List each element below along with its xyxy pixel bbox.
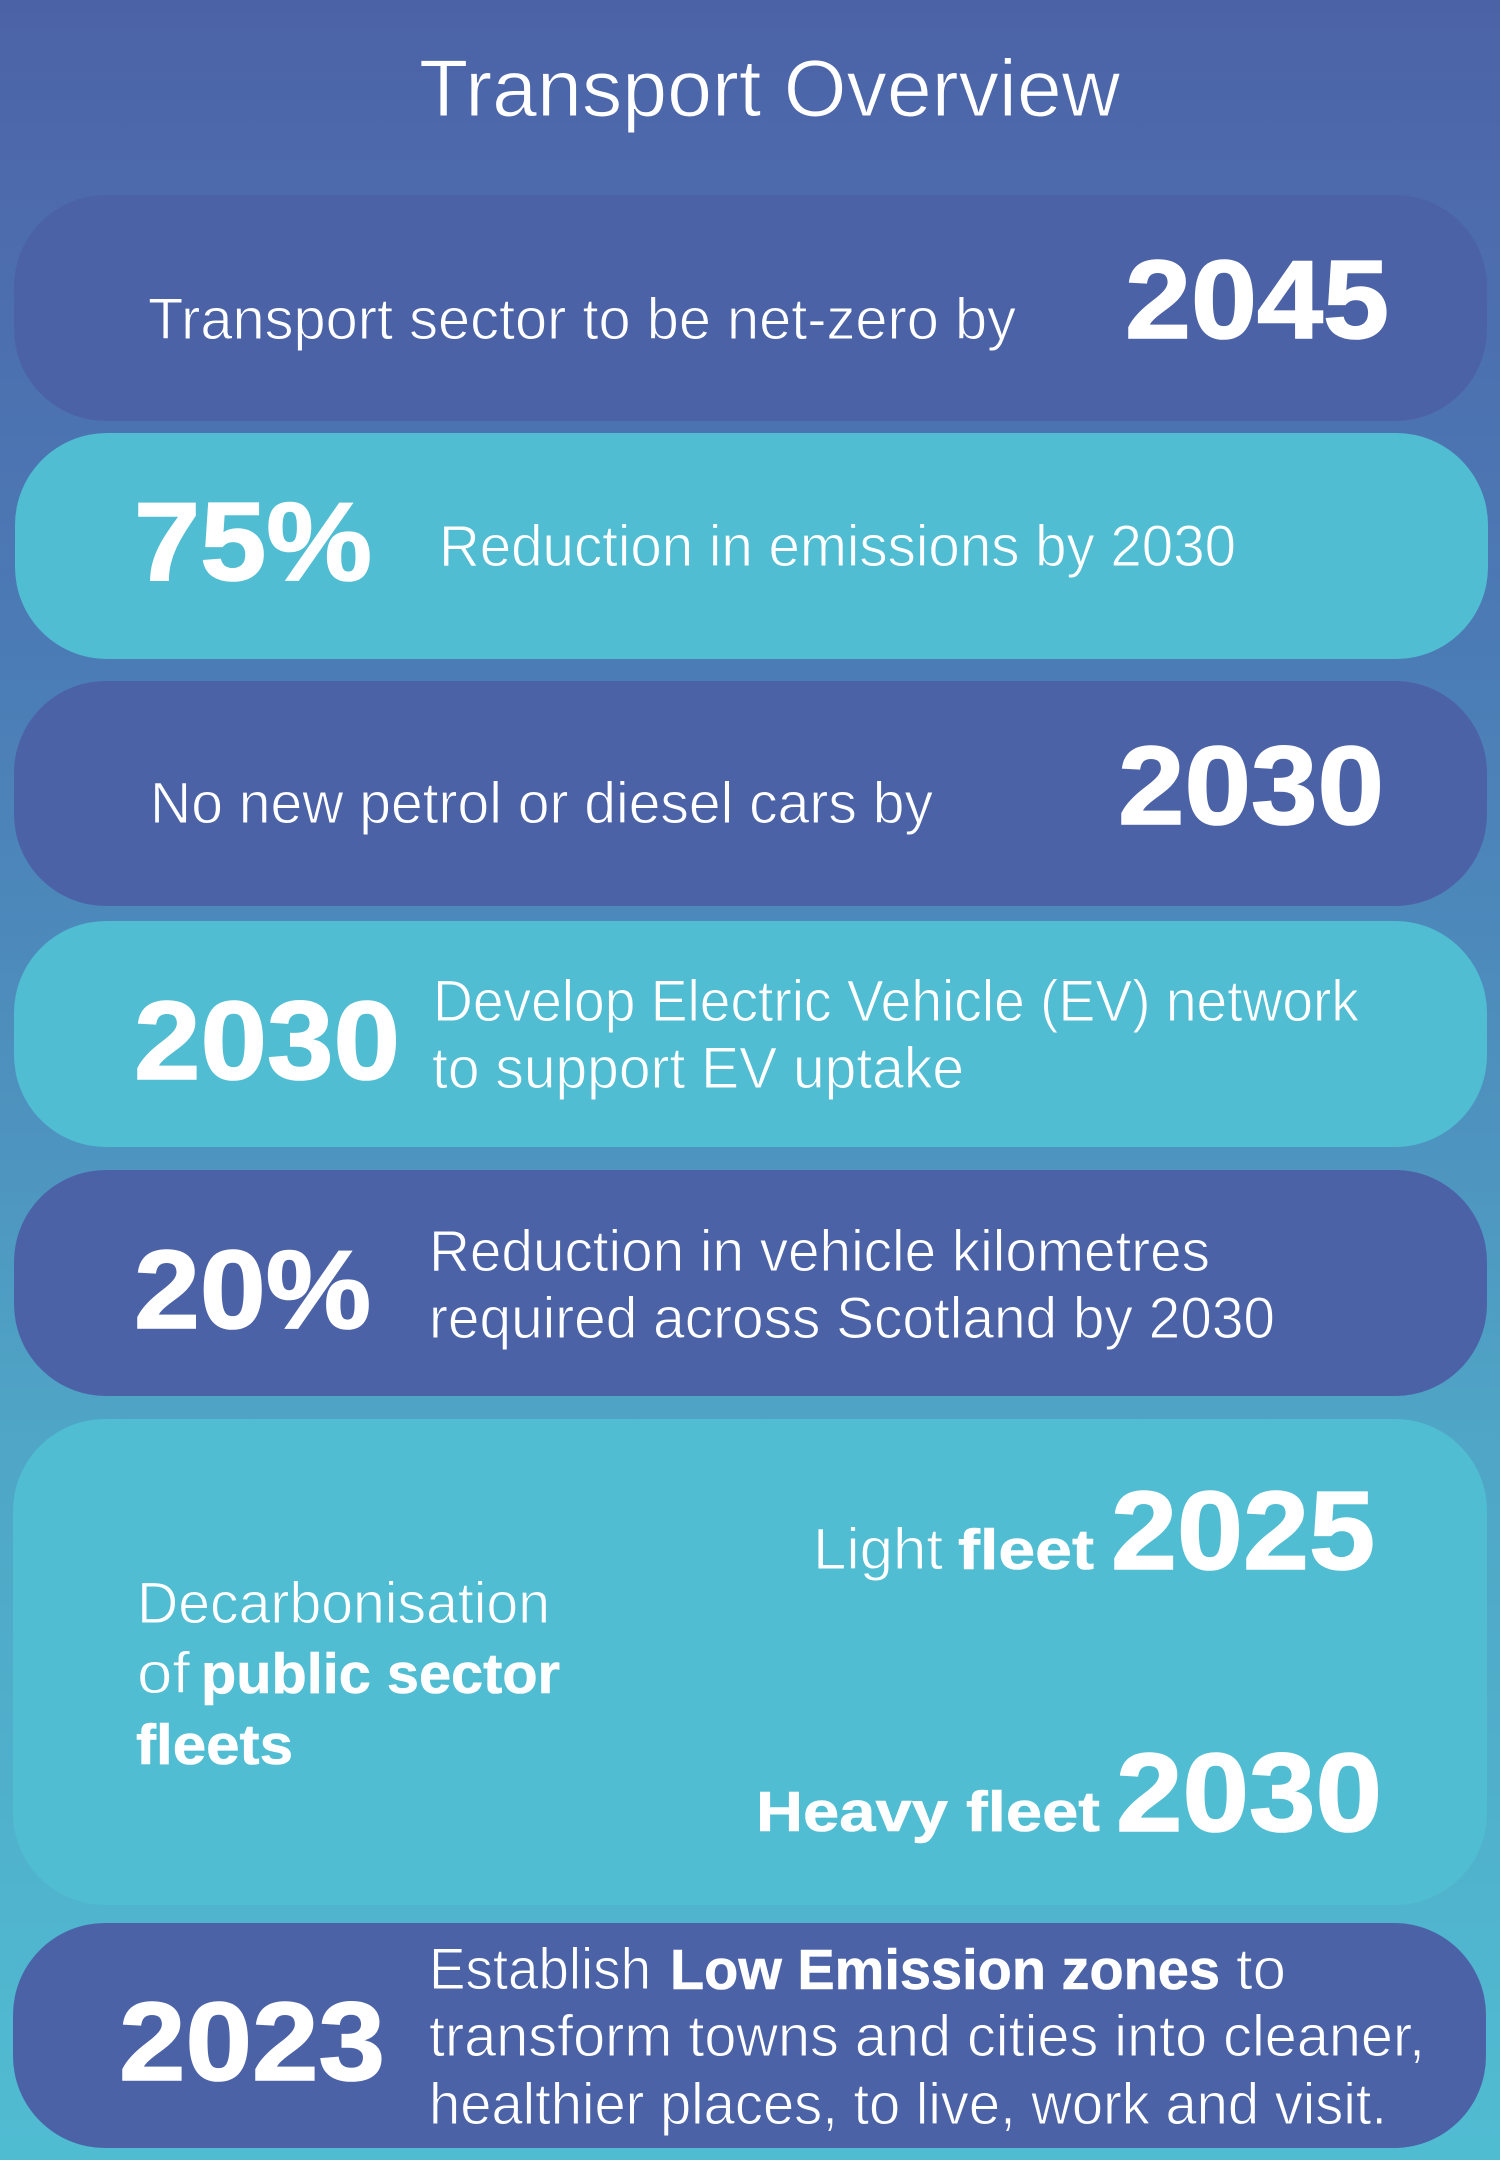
line one: Develop Electric Vehicle (EV) network [433,969,1360,1034]
statement text [429,1937,1425,2137]
statement text [429,1219,1275,1351]
label: fleet: fleet [958,1518,1094,1582]
statement text [432,969,1360,1101]
title: Transport Overview [419,44,1121,134]
figure: 75%: 75% [134,480,372,604]
line two: to support EV uptake [432,1036,964,1101]
panel: low emission zones [13,1923,1486,2148]
panel background [15,433,1488,659]
line one: Decarbonisation [137,1571,550,1636]
line one: Reduction in vehicle kilometres [429,1219,1210,1284]
figure: 2030: 2030 [1116,1731,1382,1855]
line two: transform towns and cities into cleaner, [429,2004,1425,2069]
statement text [136,1571,560,1777]
panel background [14,921,1487,1147]
statement text: No new petrol or diesel cars by [150,771,933,836]
figure: 2030: 2030 [1118,724,1384,848]
panel: EV network [14,921,1487,1147]
figure: 2045: 2045 [1125,238,1389,362]
figure: 2030: 2030 [134,979,400,1103]
line one: to: to [1236,1937,1286,2002]
figure: 2025: 2025 [1111,1469,1375,1593]
panel background [14,195,1487,421]
line two: required across Scotland by 2030 [429,1286,1275,1351]
panel: 20% vehicle kilometres [14,1170,1487,1396]
panel: net-zero by 2045 [14,195,1487,421]
line three: healthier places, to live, work and visit. [429,2072,1387,2137]
statement text: Transport sector to be net-zero by [148,287,1016,352]
figure: 2023: 2023 [119,1980,385,2104]
panel background [14,1170,1487,1396]
panel background [13,1419,1487,1905]
heavy fleet target [756,1731,1382,1855]
line two: of: of [137,1641,191,1706]
figure: 20%: 20% [134,1228,371,1352]
statement text: Reduction in emissions by 2030 [439,514,1236,579]
line two: public sector: public sector [201,1642,560,1706]
panel: no new petrol or diesel cars [14,681,1487,906]
line three: fleets [136,1713,293,1777]
label: Light: Light [813,1517,943,1582]
line one: Establish: Establish [429,1937,651,2002]
panel: public sector fleets [13,1419,1487,1905]
label: Heavy fleet: Heavy fleet [756,1780,1100,1844]
panel background [13,1923,1486,2148]
panel: 75% reduction [15,433,1488,659]
light fleet target [813,1469,1375,1593]
panel background [14,681,1487,906]
line one: Low Emission zones: Low Emission zones [670,1938,1220,2002]
